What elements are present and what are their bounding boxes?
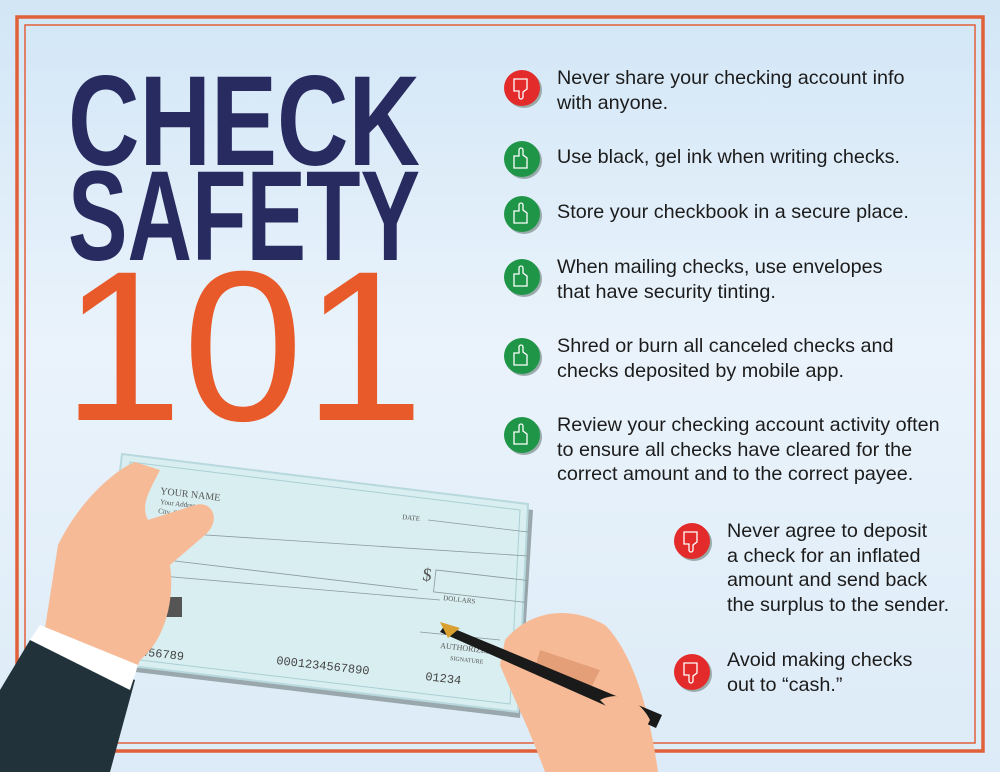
tip 4 [504, 256, 882, 302]
tip 7 (don't) [674, 520, 949, 616]
text: Never agree to deposit [727, 520, 927, 542]
check: SIGNATURE [450, 656, 484, 666]
text: amount and send back [727, 569, 927, 591]
tip 8 (don't) [674, 649, 912, 696]
left hand [0, 462, 214, 772]
check: $ [422, 564, 433, 585]
text: that have security tinting. [557, 280, 776, 302]
check: City, State, Code [158, 507, 206, 520]
check: YOUR NAME [160, 486, 221, 504]
tip 1 (don't) [504, 67, 904, 114]
illustration: hands holding check [0, 453, 662, 772]
text: a check for an inflated [727, 544, 921, 566]
check [98, 454, 533, 718]
text: to ensure all checks have cleared for the [557, 438, 912, 460]
check: Your Address [160, 498, 199, 510]
tip 5 [504, 335, 893, 382]
text: Store your checkbook in a secure place. [557, 201, 909, 223]
text: correct amount and to the correct payee. [557, 463, 913, 485]
check: 01234 [425, 670, 462, 688]
tip 2 [504, 141, 900, 179]
text: Never share your checking account info [557, 67, 904, 89]
text: the surplus to the sender. [727, 594, 949, 616]
check: AUTHORIZED [440, 641, 492, 656]
tips list [504, 67, 949, 696]
right hand with pen [440, 613, 662, 772]
title [62, 50, 424, 440]
text: out to “cash.” [727, 674, 842, 696]
text: Review your checking account activity often [557, 414, 940, 436]
check: 0001234567890 [276, 654, 370, 679]
check: DATE [402, 513, 420, 523]
text: Use black, gel ink when writing checks. [557, 146, 900, 168]
check: 0123456789 [112, 642, 185, 664]
text: Shred or burn all canceled checks and [557, 335, 893, 357]
text: When mailing checks, use envelopes [557, 256, 882, 278]
text: with anyone. [557, 92, 668, 114]
text: Avoid making checks [727, 649, 912, 671]
check: DOLLARS [443, 594, 476, 606]
tip 3 [504, 196, 909, 234]
text: checks deposited by mobile app. [557, 360, 844, 382]
tip 6 [504, 414, 940, 485]
